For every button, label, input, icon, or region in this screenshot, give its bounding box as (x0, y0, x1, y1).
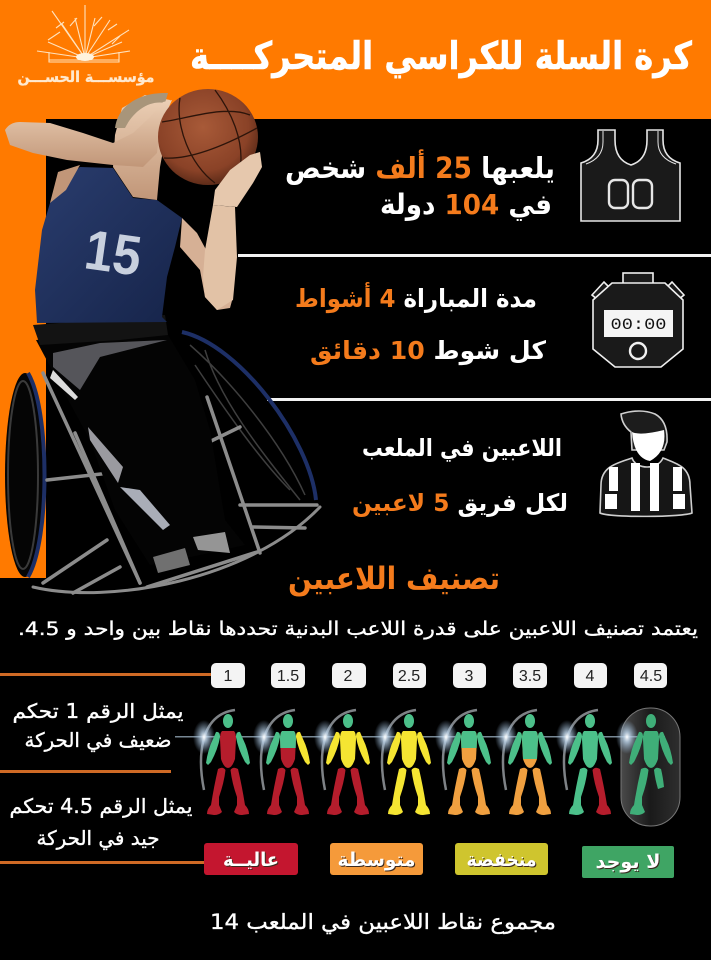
icon: sunburst logo (37, 5, 130, 62)
legend: low (455, 843, 548, 875)
support hand (213, 152, 262, 207)
score chips: 4 (586, 668, 595, 685)
left wheel (5, 373, 45, 577)
icon: jersey (581, 130, 680, 221)
logo (18, 5, 154, 86)
left note one: يمثل الرقم 1 تحكم (12, 699, 184, 723)
neck and head (113, 95, 170, 200)
basketball (158, 89, 258, 185)
info row 3 text: اللاعبين في الملعب (362, 434, 562, 462)
body figure 4 (568, 714, 612, 815)
icon: stopwatch (592, 273, 684, 367)
wheelchair frame (33, 373, 320, 593)
left note one: ضعيف في الحركة (24, 728, 172, 753)
left note one (12, 699, 184, 753)
seat and trouser highlights (33, 315, 230, 573)
divider line (267, 398, 711, 401)
total points note: مجموع نقاط اللاعبين في الملعب 14 (210, 910, 556, 934)
score chips: 3.5 (519, 668, 541, 685)
body figure 2 (326, 714, 370, 815)
legs and trousers (36, 330, 245, 565)
legend: medium (330, 843, 423, 875)
body figure 4.5 (629, 714, 673, 815)
orange background (0, 0, 711, 578)
legend: high: عاليــة (223, 849, 279, 871)
score chips: 3 (465, 668, 474, 685)
score chips (211, 663, 667, 688)
body figure 3.5 (508, 714, 552, 815)
description: يعتمد تصنيف اللاعبين على قدرة اللاعب البدنية تحددها نقاط بين واحد و 4.5. (18, 618, 698, 640)
scanner glow line (175, 710, 665, 790)
info row 2 text: مدة المباراة 4 أشواط (295, 282, 537, 314)
shooting arm (5, 100, 172, 167)
score chips: 2 (344, 668, 353, 685)
logo text: مؤسســـة الحســـن (18, 68, 154, 86)
info row 2 text (295, 282, 546, 366)
body figure 1 (206, 714, 250, 815)
legend: none: لا يوجد (596, 851, 660, 873)
icon: referee (600, 411, 692, 516)
score chips: 1 (224, 668, 233, 685)
orange side lines (0, 673, 211, 864)
score chips: 4.5 (640, 668, 662, 685)
body figure 1.5 (266, 714, 310, 815)
score chips: 2.5 (398, 668, 420, 685)
section heading: تصنيف اللاعبين (288, 561, 500, 597)
jersey number: 15 (81, 217, 145, 288)
capsule for score 4.5 (621, 708, 680, 826)
score chips: 1.5 (277, 668, 299, 685)
player in wheelchair (5, 89, 320, 593)
divider line (238, 254, 711, 257)
legend: high (204, 843, 298, 875)
info row 3 text (352, 434, 568, 517)
hair (115, 93, 168, 128)
upper support arm (180, 218, 233, 310)
left note two: جيد في الحركة (36, 826, 160, 851)
jersey (35, 167, 182, 323)
info row 1 text: في 104 دولة (380, 188, 552, 221)
shoulder (50, 165, 80, 203)
right wheel (182, 332, 316, 500)
left note two (9, 794, 192, 851)
body figure 2.5 (387, 714, 431, 815)
legend: medium: متوسطة (338, 849, 416, 871)
body figure 3 (447, 714, 491, 815)
forearm (203, 205, 237, 310)
left note two: يمثل الرقم 4.5 تحكم (9, 794, 192, 818)
info row 1 text (285, 149, 555, 221)
legend: low: منخفضة (466, 849, 536, 871)
legend: none (582, 846, 674, 878)
info row 3 text: لكل فريق 5 لاعبين (352, 489, 568, 517)
info row 1 text: يلعبها 25 ألف شخص (285, 149, 555, 185)
info row 2 text: كل شوط 10 دقائق (310, 336, 546, 366)
stopwatch digits: 00:00 (610, 316, 666, 334)
